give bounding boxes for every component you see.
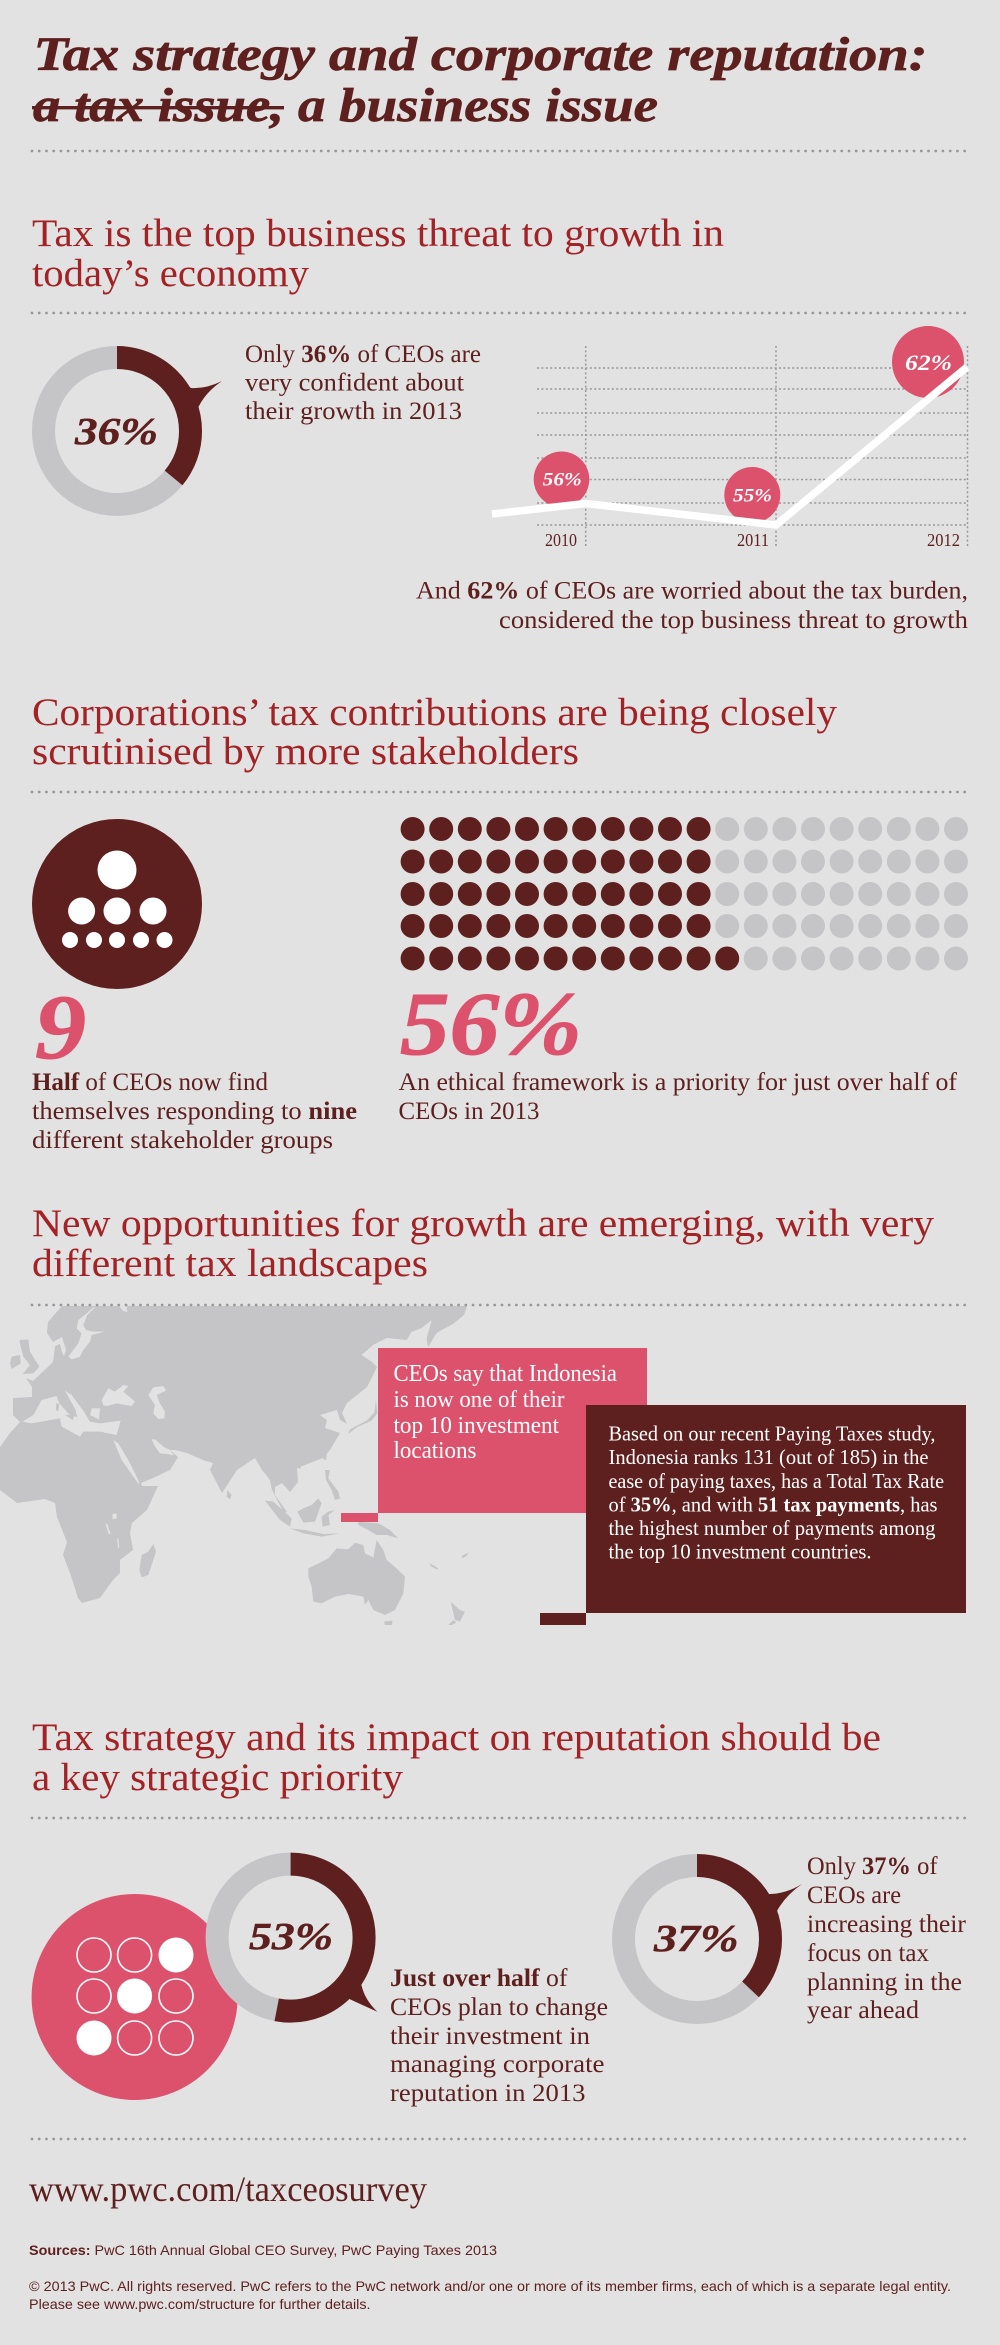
data bubble 2011 (724, 467, 780, 523)
callout: Paying Taxes study: of 35%, and with 51 tax payments, has (608, 1492, 938, 1516)
donut chart: 53% (217, 1864, 377, 2012)
seas and lakes (23, 1306, 174, 1485)
donut chart: 37% (624, 1866, 802, 2012)
icon: pink circle with nine dots (32, 1894, 238, 2100)
callout: Indonesia top 10: locations (394, 1437, 476, 1464)
text: only 37% of CEOs: CEOs are (807, 1882, 901, 1909)
title (32, 28, 928, 132)
text: only 36% of CEOs (245, 341, 481, 425)
text: only 37% of CEOs: increasing their (807, 1911, 967, 1938)
year labels: 2010 (545, 530, 577, 550)
text: ethical framework: CEOs in 2013 (398, 1098, 540, 1125)
heading: new opportunities (32, 1201, 934, 1285)
heading: tax is the top business threat: Tax is the top business threat to growth in (32, 211, 724, 255)
data bubble 2010 (534, 452, 589, 507)
data bubble 2012 (892, 326, 964, 398)
text: half of CEOs: themselves responding to nine (32, 1098, 357, 1125)
text: half of CEOs: Half of CEOs now find (32, 1069, 268, 1096)
bubble labels: 55% (733, 486, 772, 507)
trend line (492, 367, 967, 525)
heading: tax is the top business threat (32, 211, 724, 295)
callout: Indonesia top 10: CEOs say that Indonesia (394, 1360, 617, 1387)
text: half of CEOs: different stakeholder groups (32, 1127, 333, 1154)
dot grid: 56 of 100 (413, 829, 957, 958)
heading: corporations' tax contributions: scrutinised by more stakeholders (32, 729, 579, 773)
text: only 36% of CEOs: their growth in 2013 (245, 398, 462, 425)
callout: Paying Taxes study: Based on our recent Paying Taxes study, (608, 1422, 936, 1446)
heading: tax is the top business threat: today’s economy (32, 251, 309, 295)
donut chart: 36%: 36% (74, 411, 158, 453)
year labels (545, 530, 960, 550)
text: just over half: managing corporate (390, 2051, 604, 2078)
heading: tax strategy and reputation: Tax strategy and its impact on reputation should be (32, 1715, 881, 1759)
text: only 37% of CEOs: planning in the (807, 1969, 962, 1996)
text: ethical framework (398, 1069, 958, 1125)
bubble labels: 56% (543, 470, 582, 491)
sources: Sources: PwC 16th Annual Global CEO Survey, PwC Paying Taxes 2013 (29, 2242, 497, 2258)
title: Tax strategy and corporate reputation: (34, 28, 928, 81)
title: a tax issue, (33, 79, 284, 132)
heading: corporations' tax contributions: Corporations’ tax contributions are being closely (32, 690, 837, 734)
text: only 36% of CEOs: Only 36% of CEOs are (245, 341, 481, 368)
text: and 62% of CEOs: considered the top business threat to growth (499, 607, 969, 634)
icon: nine stakeholders (32, 819, 202, 989)
text: and 62% of CEOs: And 62% of CEOs are worried about the tax burden, (416, 578, 968, 604)
UK and Ireland (10, 1339, 75, 1420)
callout: Indonesia top 10: top 10 investment (394, 1412, 559, 1439)
heading: new opportunities: different tax landscapes (32, 1241, 428, 1285)
text: just over half: Just over half of (390, 1965, 568, 1992)
text: ethical framework: An ethical framework is a priority for just over half of (398, 1069, 958, 1096)
callout: Paying Taxes study: Indonesia ranks 131 (out of 185) in the (608, 1445, 928, 1469)
text: just over half: their investment in (390, 2023, 591, 2050)
line chart: CEOs worried about tax burden (492, 326, 968, 550)
text: only 36% of CEOs: very confident about (245, 370, 464, 396)
text: just over half: reputation in 2013 (390, 2080, 586, 2107)
callout: Paying Taxes study: ease of paying taxes, has a Total Tax Rate (608, 1469, 944, 1493)
bubble labels (543, 350, 952, 507)
text: just over half: CEOs plan to change (390, 1994, 608, 2021)
copyright: © 2013 PwC. All rights reserved. PwC refers to the PwC network and/or one or more of its member firms, each of which is a separate legal entity. (29, 2278, 951, 2294)
text: just over half (390, 1965, 608, 2107)
text: only 37% of CEOs: year ahead (807, 1997, 920, 2024)
Japan (295, 1400, 377, 1468)
year labels: 2012 (927, 530, 960, 550)
text: only 37% of CEOs: Only 37% of (807, 1853, 938, 1880)
world map (0, 1306, 468, 1625)
callout: Indonesia top 10 (341, 1348, 647, 1522)
Madagascar and Sri Lanka (139, 1490, 232, 1577)
callout: Paying Taxes study: the top 10 investment countries. (608, 1540, 872, 1564)
website url: www.pwc.com/taxceosurvey (29, 2169, 427, 2209)
Southeast Asia and Oceania (265, 1470, 468, 1625)
donut chart: 37%: 37% (653, 1918, 738, 1960)
copyright: Please see www.pwc.com/structure for further details. (29, 2296, 370, 2312)
heading: new opportunities: New opportunities for growth are emerging, with very (32, 1201, 934, 1245)
donut chart: 36% (44, 358, 222, 504)
bubble labels: 62% (905, 350, 952, 375)
big number: 9: 9 (35, 976, 86, 1078)
heading: corporations' tax contributions (32, 690, 837, 773)
donut chart: 53%: 53% (249, 1916, 333, 1958)
callout: Indonesia top 10: is now one of their (394, 1386, 564, 1413)
text: only 37% of CEOs: focus on tax (807, 1940, 929, 1967)
callout: Paying Taxes study: the highest number of payments among (608, 1516, 936, 1540)
heading: tax strategy and reputation (32, 1715, 881, 1799)
year labels: 2011 (737, 530, 769, 550)
copyright (29, 2278, 951, 2312)
text: and 62% of CEOs (416, 578, 969, 634)
big number: 56%: 56% (400, 975, 582, 1074)
callout: Paying Taxes study (540, 1405, 966, 1625)
text: only 37% of CEOs (807, 1853, 967, 2024)
heading: tax strategy and reputation: a key strategic priority (32, 1755, 403, 1799)
text: half of CEOs (32, 1069, 357, 1154)
title: a business issue (298, 79, 658, 132)
